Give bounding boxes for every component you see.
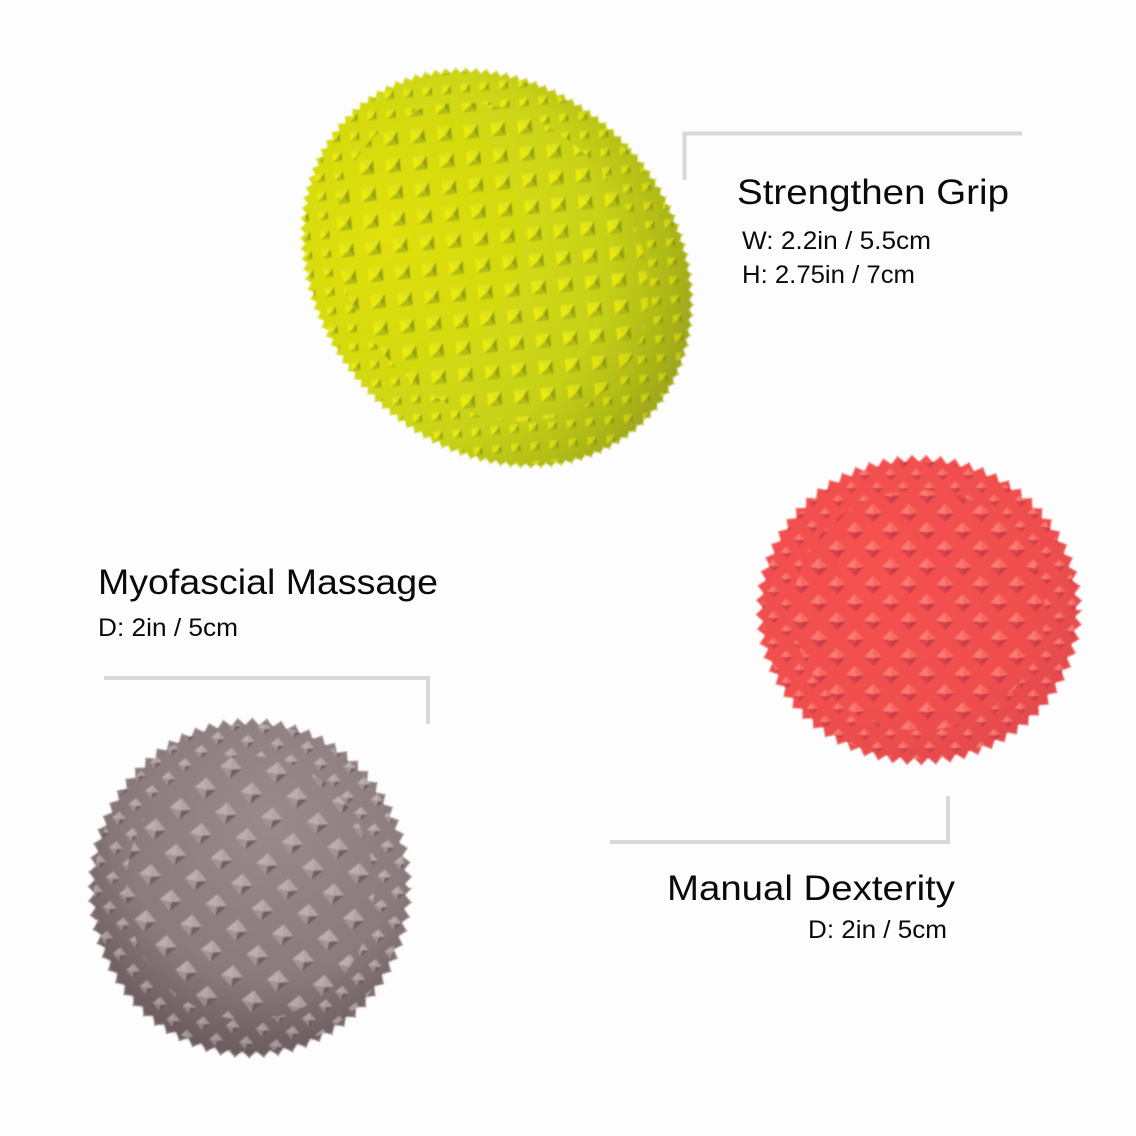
- bracket line: strengthen grip: [684, 134, 1022, 180]
- text: diameter dimensions: D: 2in / 5cm: [808, 916, 947, 944]
- bracket line: myofascial massage: [104, 678, 428, 724]
- icon: grey spiked ball: [92, 722, 408, 1054]
- icon: red spiked ball: [762, 461, 1076, 759]
- heading: manual dexterity: Manual Dexterity: [667, 869, 956, 908]
- bracket line: manual dexterity: [610, 796, 948, 842]
- text: width dimensions: W: 2.2in / 5.5cm: [742, 227, 931, 255]
- callout: myofascial massage: [98, 563, 438, 724]
- text: height dimensions: H: 2.75in / 7cm: [742, 261, 915, 289]
- callout: manual dexterity: [610, 796, 956, 944]
- heading: myofascial massage: Myofascial Massage: [98, 563, 438, 602]
- callout: strengthen grip: [684, 134, 1022, 289]
- heading: strengthen grip: Strengthen Grip: [737, 173, 1009, 212]
- icon: yellow spiked ball: [223, 0, 771, 545]
- text: diameter dimensions: D: 2in / 5cm: [98, 614, 238, 642]
